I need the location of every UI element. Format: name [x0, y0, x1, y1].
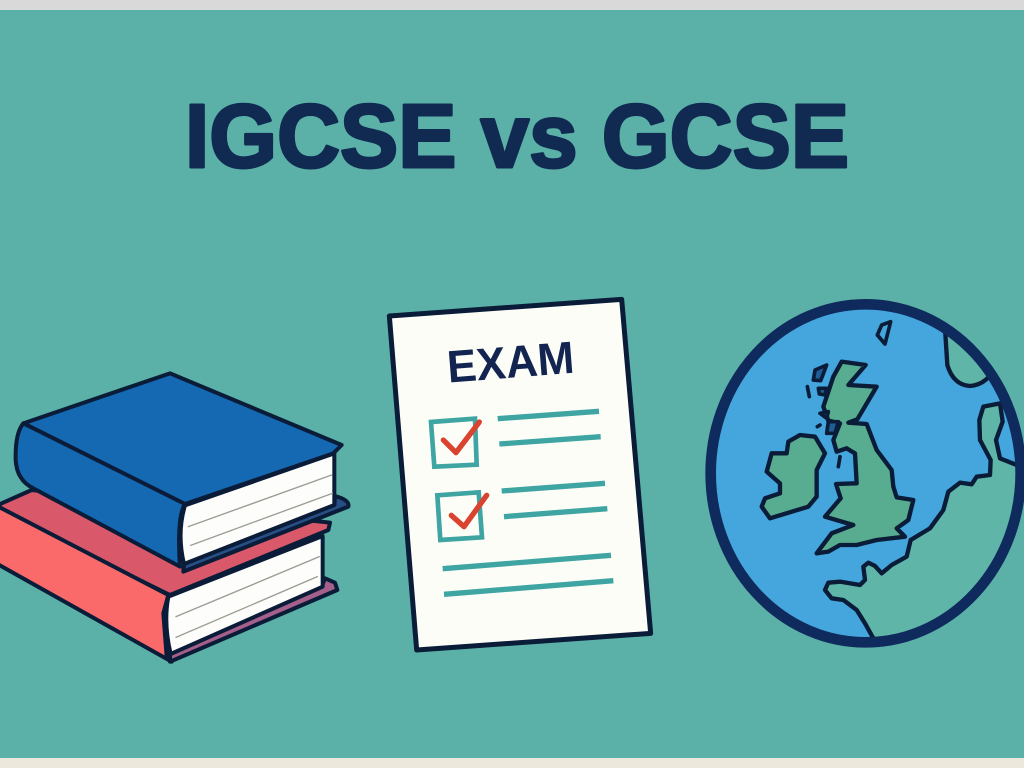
checklist item 2 — [437, 483, 607, 540]
text lines — [443, 555, 613, 594]
Ireland — [762, 435, 825, 518]
icon: exam paper — [389, 299, 651, 650]
checklist item 1 — [431, 411, 601, 467]
Great Britain — [817, 362, 913, 553]
red book — [0, 490, 337, 662]
islands — [807, 322, 891, 467]
icon: globe with UK map — [711, 303, 1024, 657]
icon: stack of books — [0, 373, 348, 662]
title: IGCSE vs GCSE — [185, 87, 849, 187]
ocean — [711, 304, 1021, 642]
globe outline — [711, 304, 1021, 642]
paper sheet — [389, 299, 651, 650]
exam label: EXAM — [445, 332, 576, 393]
blue book — [16, 373, 348, 572]
continental land — [822, 333, 1016, 637]
